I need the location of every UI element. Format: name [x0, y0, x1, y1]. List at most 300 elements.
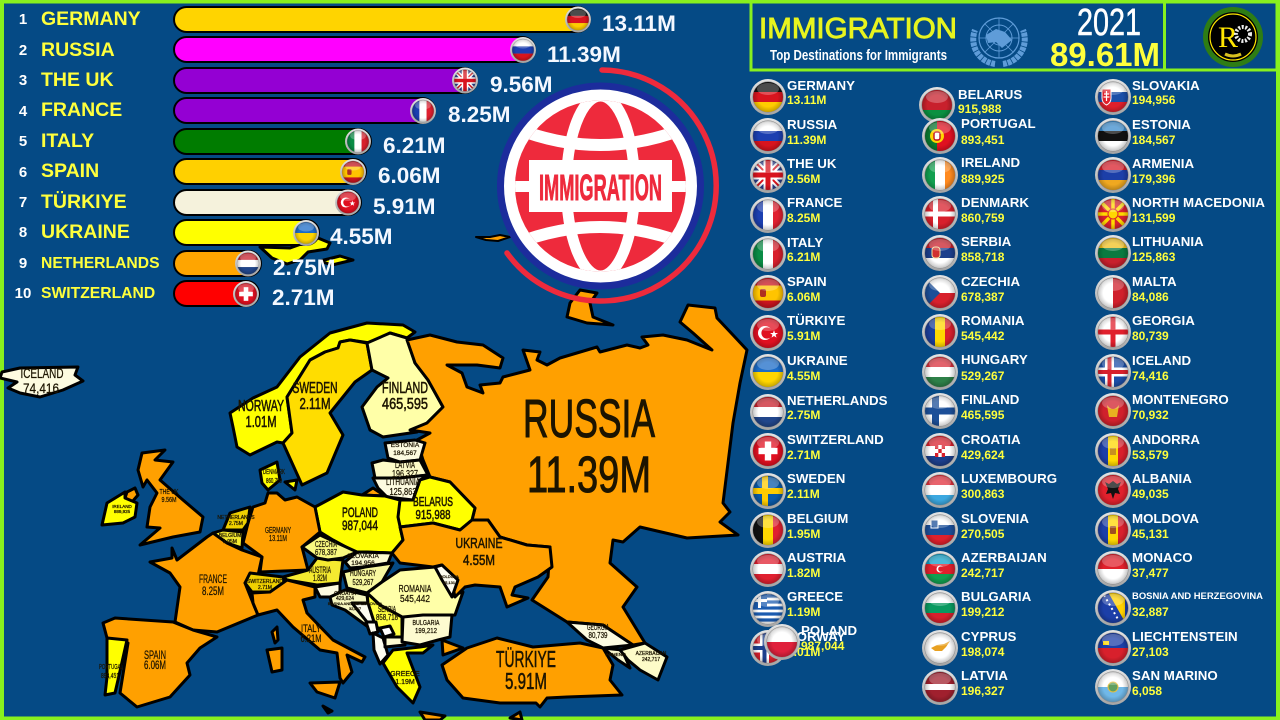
item: Poland: POLAND: [801, 623, 858, 638]
item: Norway: NORWAY: [787, 629, 846, 644]
item: Slovakia: SLOVAKIA: [1132, 78, 1200, 93]
item: Serbia: 858,718: [961, 250, 1005, 264]
map: Estonia: [385, 440, 425, 462]
item: Portugal: [922, 116, 1036, 154]
item: Poland: [764, 623, 858, 660]
map: Norway: [230, 323, 415, 455]
item: Finland: 465,595: [961, 408, 1005, 422]
map: country labels: LATVIA: [395, 460, 415, 471]
map: Poland: [315, 492, 403, 553]
item: San Marino: 6,058: [1132, 684, 1162, 698]
map: country labels: AUSTRIA: [309, 565, 331, 575]
country list: [750, 78, 1265, 705]
item: Cyprus: 198,074: [961, 645, 1005, 659]
item: Lithuania: 125,863: [1132, 250, 1176, 264]
bar: 7 Türkiye: TÜRKIYE: [41, 190, 127, 213]
map: Arctic islands: [260, 235, 613, 325]
map: country labels: 242,717: [642, 657, 660, 663]
map: country labels: 465,595: [382, 396, 428, 413]
item: Latvia: [922, 668, 1008, 705]
item: Greece: [750, 589, 843, 627]
item: Bosnia and Herzegovina: BOSNIA AND HERZEGOVINA: [1132, 591, 1264, 601]
map: country labels: BELGIUM: [219, 533, 241, 539]
map: Portugal: [105, 638, 127, 695]
item: Ireland: [922, 155, 1020, 193]
item: Lithuania: LITHUANIA: [1132, 234, 1204, 249]
item: Estonia: 184,567: [1132, 133, 1176, 147]
bar: 5 Italy: [19, 129, 446, 158]
map: country labels: 13.11M: [269, 534, 287, 543]
item: Albania: ALBANIA: [1132, 471, 1192, 486]
item: Bosnia and Herzegovina: 32,887: [1132, 605, 1169, 619]
item: San Marino: SAN MARINO: [1132, 668, 1218, 683]
map: country labels: GEORGIA: [587, 623, 609, 632]
list column 2: [919, 87, 1057, 705]
item: Belgium: BELGIUM: [787, 511, 848, 526]
map: country labels: THE UK: [160, 487, 178, 496]
item: Iceland: 74,416: [1132, 369, 1169, 383]
map: Finland: [362, 333, 443, 437]
bar: 3 The UK: 3: [19, 72, 27, 89]
item: Cyprus: [922, 629, 1017, 666]
item: Malta: 84,086: [1132, 290, 1169, 304]
bar: 6 Spain: 6.06M: [378, 163, 441, 188]
item: Moldova: 45,131: [1132, 527, 1169, 541]
map: Kosovo: [380, 626, 394, 637]
bar: 1 Germany: [19, 7, 676, 36]
bar: 2 Russia: [19, 37, 621, 67]
map: country labels: 5.91M: [505, 668, 547, 694]
bar: 3 The UK: THE UK: [41, 69, 114, 91]
map: country labels: SLOVAKIA: [347, 553, 380, 560]
map: Croatia: [330, 590, 375, 632]
item: Malta: [1095, 274, 1177, 311]
item: Bulgaria: [922, 589, 1032, 626]
item: Greece: GREECE: [787, 589, 843, 604]
item: Austria: AUSTRIA: [787, 550, 846, 565]
map: country labels: 6.21M: [300, 633, 322, 645]
item: Ukraine: 4.55M: [787, 369, 820, 383]
map: country labels: 1.95M: [223, 539, 237, 545]
map: Armenia: [603, 648, 630, 668]
item: Belgium: 1.95M: [787, 527, 820, 541]
map: country labels: 6.06M: [144, 658, 166, 672]
icon: UN emblem: [973, 18, 1025, 64]
item: Andorra: [1095, 432, 1200, 469]
item: North Macedonia: [1095, 195, 1265, 232]
map: country labels: BOSNIA AND HERZEGOVINA: [328, 601, 383, 606]
bar: 1 Germany: 1: [19, 11, 27, 28]
item: Moldova: MOLDOVA: [1132, 511, 1199, 526]
map: country labels: 889,925: [114, 509, 131, 514]
item: Belgium: [750, 511, 848, 548]
item: Sweden: [750, 471, 845, 509]
map: Netherlands: [223, 507, 250, 530]
item: Iceland: ICELAND: [1132, 353, 1191, 368]
item: Slovenia: SLOVENIA: [961, 511, 1029, 526]
header panel: [751, 2, 1277, 73]
item: Greece: 1.19M: [787, 605, 820, 619]
item: Andorra: 53,579: [1132, 448, 1169, 462]
map: country labels: 9.56M: [162, 495, 176, 504]
bar: 7 Türkiye: [19, 190, 436, 219]
item: Denmark: 860,759: [961, 211, 1005, 225]
bar: 10 Switzerland: SWITZERLAND: [41, 285, 155, 302]
item: Moldova: [1095, 511, 1199, 548]
map: country labels: CZECHIA: [315, 539, 337, 549]
item: Monaco: [1095, 550, 1193, 587]
item: The UK: THE UK: [787, 156, 837, 171]
item: Bosnia and Herzegovina: [1095, 590, 1264, 626]
bar: 5 Italy: 6.21M: [383, 133, 446, 158]
item: Russia: [750, 117, 838, 154]
map: country labels: POLAND: [342, 504, 378, 520]
item: Cyprus: CYPRUS: [961, 629, 1017, 644]
map: Moldova: [435, 565, 458, 597]
map: Greece: [383, 645, 433, 703]
item: Azerbaijan: 242,717: [961, 566, 1005, 580]
map: country labels: 32,887: [349, 606, 362, 611]
map: country labels: 1.19M: [395, 679, 415, 686]
heading: IMMIGRATION: [759, 13, 957, 45]
map: country labels: 529,267: [352, 578, 374, 587]
item: Luxembourg: LUXEMBOURG: [961, 471, 1057, 486]
map: Azerbaijan: [620, 643, 667, 680]
item: Slovakia: 194,956: [1132, 93, 1176, 107]
map: Belarus: [397, 477, 475, 530]
item: Norway: [750, 629, 846, 666]
year: 2021: [1077, 2, 1141, 44]
map: country labels: 11.39M: [527, 446, 651, 503]
map: country labels: 45,131: [443, 580, 456, 585]
map: country labels: 184,567: [393, 450, 417, 457]
bar: 1 Germany: 13.11M: [602, 11, 676, 36]
item: Estonia: [1095, 117, 1191, 154]
map: country labels: BELARUS: [413, 494, 453, 509]
map: Lithuania: [373, 475, 428, 500]
item: Liechtenstein: LIECHTENSTEIN: [1132, 629, 1238, 644]
item: Türkiye: 5.91M: [787, 329, 820, 343]
map: country labels: 2.71M: [258, 585, 272, 591]
item: Estonia: ESTONIA: [1132, 117, 1191, 132]
bar: 4 France: 8.25M: [448, 102, 511, 127]
bar: 8 Ukraine: UKRAINE: [41, 221, 130, 243]
item: Ireland: IRELAND: [961, 155, 1020, 170]
map: Slovakia: [345, 552, 392, 568]
item: North Macedonia: 131,599: [1132, 211, 1176, 225]
map: country labels: SPAIN: [144, 648, 166, 662]
map: Germany: [243, 493, 320, 572]
item: Sweden: 2.11M: [787, 487, 820, 501]
bar: 5 Italy: 5: [19, 133, 27, 150]
item: Hungary: HUNGARY: [961, 352, 1028, 367]
item: Russia: RUSSIA: [787, 117, 838, 132]
map: Serbia: [367, 593, 402, 640]
item: Portugal: PORTUGAL: [961, 116, 1036, 131]
map: country labels: FRANCE: [199, 572, 227, 586]
item: The UK: 9.56M: [787, 172, 820, 186]
item: Armenia: [1095, 156, 1194, 193]
item: France: FRANCE: [787, 195, 843, 210]
bar: 2 Russia: RUSSIA: [41, 39, 115, 61]
map: small southern islands: [323, 706, 522, 720]
bar: 3 The UK: 9.56M: [490, 72, 553, 97]
item: Bulgaria: 199,212: [961, 605, 1005, 619]
map: country labels: ESTONIA: [391, 442, 420, 449]
map: country labels: CROATIA: [334, 591, 357, 597]
map: country labels: TÜRKIYE: [496, 646, 556, 672]
item: Romania: ROMANIA: [961, 313, 1025, 328]
map: country labels: UKRAINE: [456, 535, 502, 552]
immigration globe logo: IMMIGRATION: [539, 167, 662, 208]
map of Europe: [0, 235, 747, 720]
bar: 9 Netherlands: 9: [19, 255, 27, 272]
map: country labels: 1.82M: [313, 573, 327, 583]
map: Albania: [373, 633, 388, 664]
item: Italy: ITALY: [787, 235, 823, 250]
bar: 4 France: 4: [19, 103, 28, 120]
map: country labels: MOLDOVA: [439, 574, 459, 579]
item: Armenia: ARMENIA: [1132, 156, 1194, 171]
map: Iceland: ICELAND: [20, 365, 64, 381]
map: Montenegro: [366, 622, 378, 634]
item: Iceland: [1095, 353, 1191, 390]
map: Italy: [252, 580, 365, 698]
map: Bulgaria: [402, 615, 452, 645]
item: Czechia: 678,387: [961, 290, 1005, 304]
map: country labels: 987,044: [342, 517, 378, 533]
immigration globe logo: [500, 70, 716, 301]
bar: 10 Switzerland: [15, 281, 335, 310]
map: country labels: RUSSIA: [523, 389, 655, 449]
item: Monaco: 37,477: [1132, 566, 1169, 580]
item: Montenegro: [1095, 392, 1229, 429]
icon: channel logo: R: [1218, 21, 1238, 54]
bar: 6 Spain: [19, 159, 441, 188]
item: Montenegro: 70,932: [1132, 408, 1169, 422]
item: Germany: 13.11M: [787, 93, 826, 107]
bar: 5 Italy: ITALY: [41, 130, 94, 152]
item: Georgia: GEORGIA: [1132, 313, 1195, 328]
map: country labels: FINLAND: [382, 380, 428, 397]
map: country labels: NORWAY: [238, 398, 284, 415]
item: Sweden: SWEDEN: [787, 471, 845, 486]
item: Spain: SPAIN: [787, 274, 827, 289]
item: The UK: [750, 156, 837, 193]
bar: 7 Türkiye: 5.91M: [373, 194, 436, 219]
map: Kaliningrad: [362, 488, 385, 496]
item: Spain: 6.06M: [787, 290, 820, 304]
item: Czechia: CZECHIA: [961, 274, 1020, 289]
map: country labels: DENMARK: [263, 469, 285, 476]
item: Croatia: 429,624: [961, 448, 1005, 462]
item: Romania: [922, 313, 1025, 350]
map: country labels: 545,442: [400, 594, 430, 605]
item: Czechia: [922, 274, 1020, 311]
icon: channel logo: [1203, 7, 1263, 67]
item: France: [750, 195, 843, 233]
map: country labels: 2.11M: [300, 396, 330, 413]
map: country labels: GERMANY: [265, 526, 291, 535]
item: Serbia: SERBIA: [961, 234, 1012, 249]
subtitle: Top Destinations for Immigrants: [770, 47, 947, 64]
bar: 10 Switzerland: 2.71M: [272, 285, 335, 310]
item: Switzerland: 2.71M: [787, 448, 820, 462]
map: country labels: ROMANIA: [398, 584, 432, 595]
item: Georgia: 80,739: [1132, 329, 1169, 343]
bar: 4 France: [19, 98, 511, 127]
item: Denmark: DENMARK: [961, 195, 1029, 210]
item: Austria: 1.82M: [787, 566, 820, 580]
item: Albania: [1095, 471, 1192, 508]
item: Croatia: CROATIA: [961, 432, 1021, 447]
map: country labels: GREECE: [390, 671, 420, 678]
bar: 8 Ukraine: 8: [19, 224, 27, 241]
item: Belarus: 915,988: [958, 102, 1002, 116]
item: Slovenia: [922, 511, 1029, 548]
item: Luxembourg: [922, 471, 1057, 508]
item: Latvia: 196,327: [961, 684, 1005, 698]
item: Belarus: BELARUS: [958, 87, 1022, 102]
map: Austria: [283, 558, 343, 585]
item: Azerbaijan: AZERBAIJAN: [961, 550, 1047, 565]
map: Russia: [407, 305, 747, 645]
map: country labels: 1.01M: [246, 414, 276, 431]
item: North Macedonia: NORTH MACEDONIA: [1132, 195, 1265, 210]
item: Andorra: ANDORRA: [1132, 432, 1200, 447]
map: Sweden: [283, 340, 372, 485]
item: Slovakia: [1095, 78, 1200, 115]
map: Switzerland: [245, 573, 285, 592]
list column 1: [750, 78, 888, 666]
item: Switzerland: SWITZERLAND: [787, 432, 884, 447]
bar: 7 Türkiye: 7: [19, 194, 27, 211]
map: country labels: ARMENIA: [606, 652, 626, 657]
map: country labels: SERBIA: [378, 605, 396, 614]
map: country labels: 199,212: [415, 626, 437, 635]
item: Malta: MALTA: [1132, 274, 1177, 289]
map: Georgia: [567, 622, 633, 648]
item: France: 8.25M: [787, 211, 820, 225]
map: Denmark: [260, 462, 297, 490]
map: country labels: NETHERLANDS: [217, 515, 255, 521]
map: country labels: HUNGARY: [350, 569, 376, 578]
map: Bosnia and Herzegovina: [352, 603, 378, 632]
map: country labels: AZERBAIJAN: [636, 651, 667, 657]
map: country labels: 196,327: [392, 469, 418, 480]
map: country labels: SWITZERLAND: [247, 579, 283, 585]
item: Türkiye: [750, 313, 845, 351]
item: Italy: 6.21M: [787, 250, 820, 264]
item: Serbia: [922, 234, 1012, 271]
map: United Kingdom: [125, 450, 203, 545]
item: Armenia: 179,396: [1132, 172, 1176, 186]
map: country labels: SWEDEN: [292, 380, 338, 397]
bar: 9 Netherlands: NETHERLANDS: [41, 255, 160, 272]
item: Hungary: 529,267: [961, 369, 1005, 383]
item: Hungary: [922, 352, 1028, 390]
map: country labels: BULGARIA: [412, 618, 440, 627]
item: Denmark: [922, 195, 1029, 232]
map: Spain: [103, 618, 217, 707]
map: Iceland: [0, 365, 83, 397]
map: country labels: 2.75M: [229, 521, 243, 527]
item: Norway: 1.01M: [787, 645, 820, 659]
map: country labels: 893,451: [101, 671, 119, 680]
map: country labels: [99, 380, 667, 694]
item: Ukraine: [750, 353, 848, 390]
bar: 9 Netherlands: 2.75M: [273, 255, 336, 280]
map: Türkiye: [442, 638, 622, 707]
map: Latvia: [372, 460, 428, 478]
map: Ukraine: [392, 520, 552, 607]
item: Liechtenstein: 27,103: [1132, 645, 1169, 659]
item: Spain: [750, 274, 827, 311]
item: Ireland: 889,925: [961, 172, 1005, 186]
map: country labels: 80,739: [588, 631, 608, 640]
bar: 2 Russia: 2: [19, 42, 27, 59]
item: Latvia: LATVIA: [961, 668, 1008, 683]
item: Germany: GERMANY: [787, 78, 855, 93]
bar: 3 The UK: [19, 68, 553, 97]
map: country labels: 194,956: [351, 560, 375, 567]
map: country labels: LITHUANIA: [386, 477, 420, 488]
item: Luxembourg: 300,863: [961, 487, 1005, 501]
map: country labels: ITALY: [301, 623, 321, 635]
map: Czechia: [302, 535, 357, 560]
item: Ukraine: UKRAINE: [787, 353, 848, 368]
map: country labels: 860,759: [266, 478, 282, 485]
item: Austria: [750, 550, 846, 587]
map: country labels: PORTUGAL: [99, 662, 123, 671]
item: San Marino: [1095, 668, 1218, 705]
item: Romania: 545,442: [961, 329, 1005, 343]
item: Albania: 49,035: [1132, 487, 1169, 501]
item: Monaco: MONACO: [1132, 550, 1193, 565]
map: country labels: 8.25M: [202, 584, 224, 598]
item: Germany: [750, 78, 855, 115]
bar: 9 Netherlands: [19, 251, 336, 280]
bar: 8 Ukraine: 4.55M: [330, 224, 393, 249]
item: Georgia: [1095, 313, 1195, 350]
bar: 2 Russia: 11.39M: [547, 42, 621, 67]
item: Italy: [750, 235, 823, 272]
item: Liechtenstein: [1095, 629, 1238, 666]
bar chart: top 10 destinations: [15, 7, 676, 310]
item: Slovenia: 270,505: [961, 527, 1005, 541]
map: Slovenia: [315, 583, 340, 597]
bar: 8 Ukraine: [19, 220, 393, 249]
map: country labels: 429,624: [336, 596, 354, 602]
map: country labels: IRELAND: [112, 504, 132, 509]
bar: 6 Spain: SPAIN: [41, 160, 99, 182]
item: Switzerland: [750, 432, 884, 469]
map: country labels: 4.55M: [463, 552, 495, 569]
item: Russia: 11.39M: [787, 133, 826, 147]
map: Romania: [367, 567, 463, 617]
map: Iceland: 74,416: [23, 380, 59, 396]
total immigrants: 89.61M: [1050, 36, 1160, 73]
item: Montenegro: MONTENEGRO: [1132, 392, 1229, 407]
map: Ireland: [102, 492, 137, 525]
map: country labels: 125,863: [390, 487, 417, 498]
map: North Macedonia: [385, 637, 405, 647]
map: Belgium: [213, 530, 243, 548]
item: Netherlands: [750, 393, 888, 430]
bar: 10 Switzerland: 10: [15, 285, 31, 302]
map: country labels: 678,387: [315, 547, 337, 557]
item: Portugal: 893,451: [961, 133, 1005, 147]
